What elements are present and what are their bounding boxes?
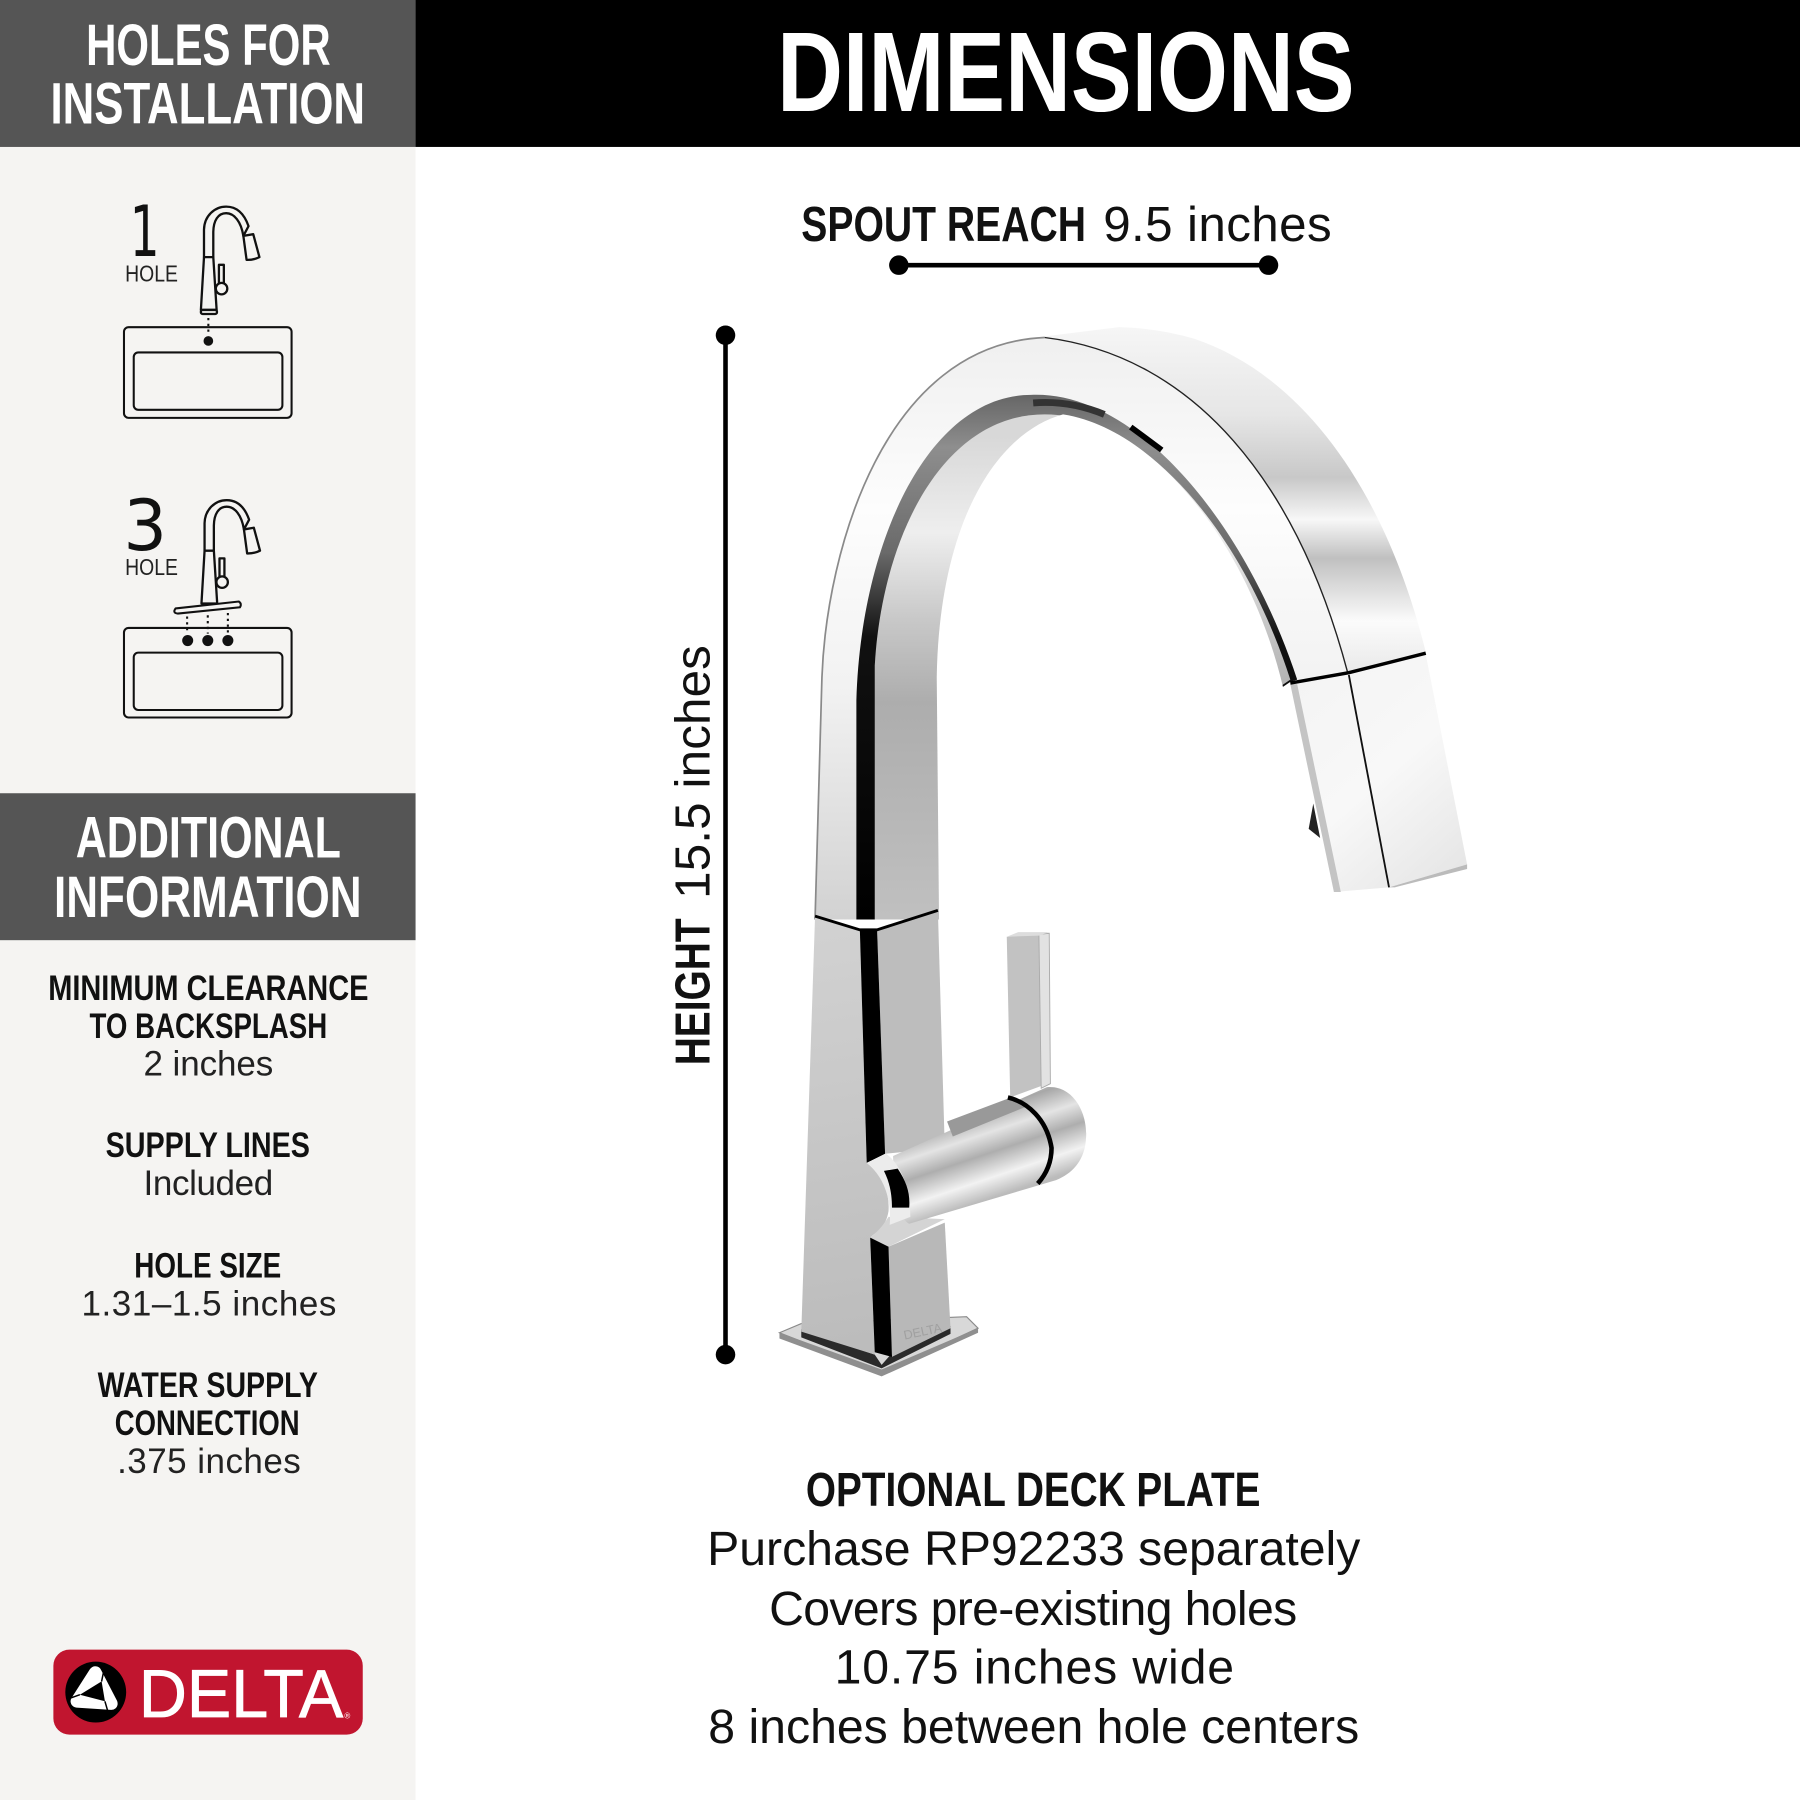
label: height: HEIGHT — [665, 918, 720, 1065]
spout: arch opening — [937, 414, 1283, 920]
text: minimum clearance: TO BACKSPLASH — [90, 1007, 327, 1046]
text: supply lines — [106, 1126, 310, 1203]
label: height — [665, 645, 720, 1065]
spout: front face — [815, 338, 1348, 920]
text: water supply connection: .375 inches — [117, 1442, 301, 1481]
label: height: 15.5 inches — [665, 645, 720, 899]
callout: optional deck plate: Purchase RP92233 separately — [707, 1522, 1360, 1576]
text: water supply connection: CONNECTION — [115, 1404, 300, 1443]
spout: outer right face — [1035, 327, 1426, 673]
label: spout reach — [801, 197, 1332, 252]
arrow: height dimension line — [716, 325, 735, 1364]
arrow: spout reach dimension line — [889, 255, 1278, 275]
icon: one hole installation: HOLE — [125, 260, 178, 286]
text: hole size — [82, 1247, 336, 1324]
label: spout reach: SPOUT REACH — [801, 197, 1086, 252]
icon: three hole installation: 3 — [123, 485, 167, 567]
callout: optional deck plate: 10.75 inches wide — [835, 1640, 1234, 1694]
logo: delta: ® — [344, 1711, 350, 1720]
heading: additional information: ADDITIONAL — [76, 806, 341, 871]
base plate — [779, 1317, 978, 1376]
callout: optional deck plate: Covers pre-existing holes — [769, 1582, 1297, 1636]
callout: optional deck plate — [707, 1463, 1360, 1754]
heading: holes for installation — [0, 0, 416, 147]
spout: underside — [875, 414, 1290, 920]
icon: three hole installation: HOLE — [125, 554, 178, 580]
icon: three hole installation — [123, 485, 292, 717]
heading: holes for installation: HOLES FOR — [86, 13, 331, 78]
label: spout reach: 9.5 inches — [1103, 197, 1332, 252]
text: minimum clearance: MINIMUM CLEARANCE — [48, 969, 368, 1008]
illustration: chrome faucet — [779, 327, 1467, 1376]
heading: dimensions — [416, 0, 1800, 147]
text: hole size: 1.31–1.5 inches — [82, 1285, 336, 1324]
text: water supply connection — [98, 1366, 318, 1481]
text: minimum clearance — [48, 969, 368, 1084]
logo: delta: DELTA — [139, 1657, 344, 1732]
text: supply lines: Included — [143, 1164, 273, 1203]
callout: optional deck plate: 8 inches between hole centers — [708, 1700, 1359, 1754]
text: hole size: HOLE SIZE — [134, 1247, 281, 1286]
heading: additional information: INFORMATION — [54, 865, 362, 930]
text: minimum clearance: 2 inches — [143, 1045, 273, 1084]
handle cylinder — [867, 1087, 1086, 1225]
lower body — [801, 916, 889, 1355]
icon: one hole installation — [124, 191, 292, 418]
logo: delta — [53, 1650, 363, 1735]
spout: chamfer band — [856, 395, 1297, 920]
handle lever — [1007, 932, 1050, 1097]
delta mark on body: DELTA — [902, 1321, 944, 1343]
heading: holes for installation: INSTALLATION — [51, 71, 365, 136]
text: supply lines: SUPPLY LINES — [106, 1126, 310, 1165]
callout: optional deck plate: OPTIONAL DECK PLATE — [806, 1463, 1260, 1517]
heading: dimensions: DIMENSIONS — [777, 9, 1355, 136]
text: water supply connection: WATER SUPPLY — [98, 1366, 318, 1405]
panel: sidebar background — [0, 0, 416, 1800]
icon: one hole installation: 1 — [130, 191, 160, 273]
spray head — [1290, 653, 1467, 892]
heading: additional information — [0, 793, 416, 940]
